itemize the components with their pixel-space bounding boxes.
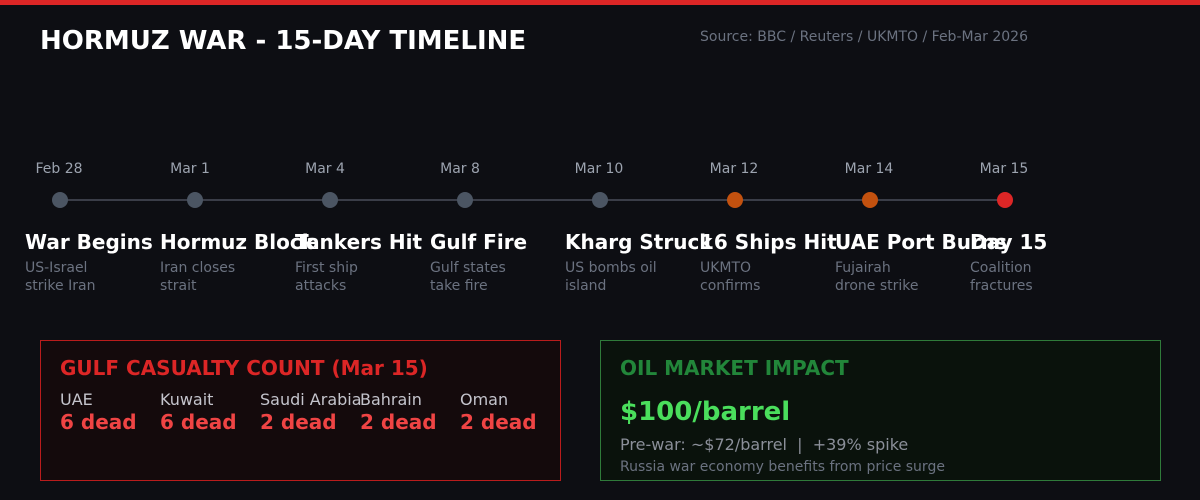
event: Mar 1: strait: [160, 278, 197, 294]
event: Mar 4: [295, 161, 422, 294]
event: Mar 10: Mar 10: [575, 161, 623, 177]
panel: oil market: Russia war economy benefits from price surge: [620, 459, 945, 475]
event: Mar 1: Hormuz Block: [160, 230, 316, 254]
panel: casualties: Bahrain: [360, 390, 422, 409]
event: Mar 14: Fujairah: [835, 260, 891, 276]
event: Mar 8: [430, 161, 527, 294]
event: Feb 28: Feb 28: [35, 161, 83, 177]
source: Source: BBC / Reuters / UKMTO / Feb-Mar 2026: [700, 29, 1028, 45]
event: Mar 8: Gulf states: [430, 260, 506, 276]
event: Mar 15: Coalition: [970, 260, 1032, 276]
event: Mar 12: [700, 161, 837, 294]
event: Mar 14: Mar 14: [845, 161, 893, 177]
event: Mar 1: [160, 161, 316, 294]
event: Mar 14: drone strike: [835, 278, 918, 294]
event: Mar 15: [970, 161, 1047, 294]
event: Mar 15: Mar 15: [980, 161, 1028, 177]
event: Feb 28: strike Iran: [25, 278, 95, 294]
panel: casualties: 6 dead: [160, 410, 237, 434]
panel: oil market: OIL MARKET IMPACT: [620, 356, 849, 380]
panel: casualties: Kuwait: [160, 390, 213, 409]
event: Mar 14: [835, 161, 1007, 294]
event: Mar 15: Day 15: [970, 230, 1047, 254]
timeline: [25, 161, 1047, 294]
event: Mar 4: Tankers Hit: [295, 230, 422, 254]
event: Mar 10: island: [565, 278, 606, 294]
event: Mar 10: US bombs oil: [565, 260, 657, 276]
panel: casualties: 6 dead: [60, 410, 137, 434]
event: Mar 12: UKMTO: [700, 260, 751, 276]
panel: casualties: 2 dead: [260, 410, 337, 434]
panel: oil market: [600, 340, 1160, 480]
event: Mar 10: [565, 161, 713, 294]
event: Mar 12: Mar 12: [710, 161, 758, 177]
event: Feb 28: US-Israel: [25, 260, 87, 276]
panel: casualties: UAE: [60, 390, 93, 409]
panel: casualties: GULF CASUALTY COUNT (Mar 15): [60, 356, 428, 380]
event: Mar 1: Mar 1: [170, 161, 210, 177]
event: Mar 12: confirms: [700, 278, 760, 294]
event: Mar 8: take fire: [430, 278, 488, 294]
event: Mar 14: UAE Port Burns: [835, 230, 1007, 254]
event: Feb 28: [25, 161, 153, 294]
panel: casualties: 2 dead: [360, 410, 437, 434]
panel: casualties: 2 dead: [460, 410, 537, 434]
event: Mar 10: Kharg Struck: [565, 230, 713, 254]
event: Mar 1: Iran closes: [160, 260, 235, 276]
event: Mar 8: Mar 8: [440, 161, 480, 177]
panel: casualties: Oman: [460, 390, 508, 409]
event: Mar 4: First ship: [295, 260, 358, 276]
event: Mar 4: attacks: [295, 278, 346, 294]
panel: casualties: [40, 340, 560, 480]
event: Feb 28: War Begins: [25, 230, 153, 254]
panel: oil market: Pre-war: ~$72/barrel | +39% spike: [620, 435, 908, 454]
panel: oil market: $100/barrel: [620, 397, 790, 427]
event: Mar 8: Gulf Fire: [430, 230, 527, 254]
event: Mar 12: 16 Ships Hit: [700, 230, 837, 254]
panel: casualties: Saudi Arabia: [260, 390, 362, 409]
event: Mar 4: Mar 4: [305, 161, 345, 177]
event: Mar 15: fractures: [970, 278, 1033, 294]
title: HORMUZ WAR - 15-DAY TIMELINE: [40, 26, 526, 56]
